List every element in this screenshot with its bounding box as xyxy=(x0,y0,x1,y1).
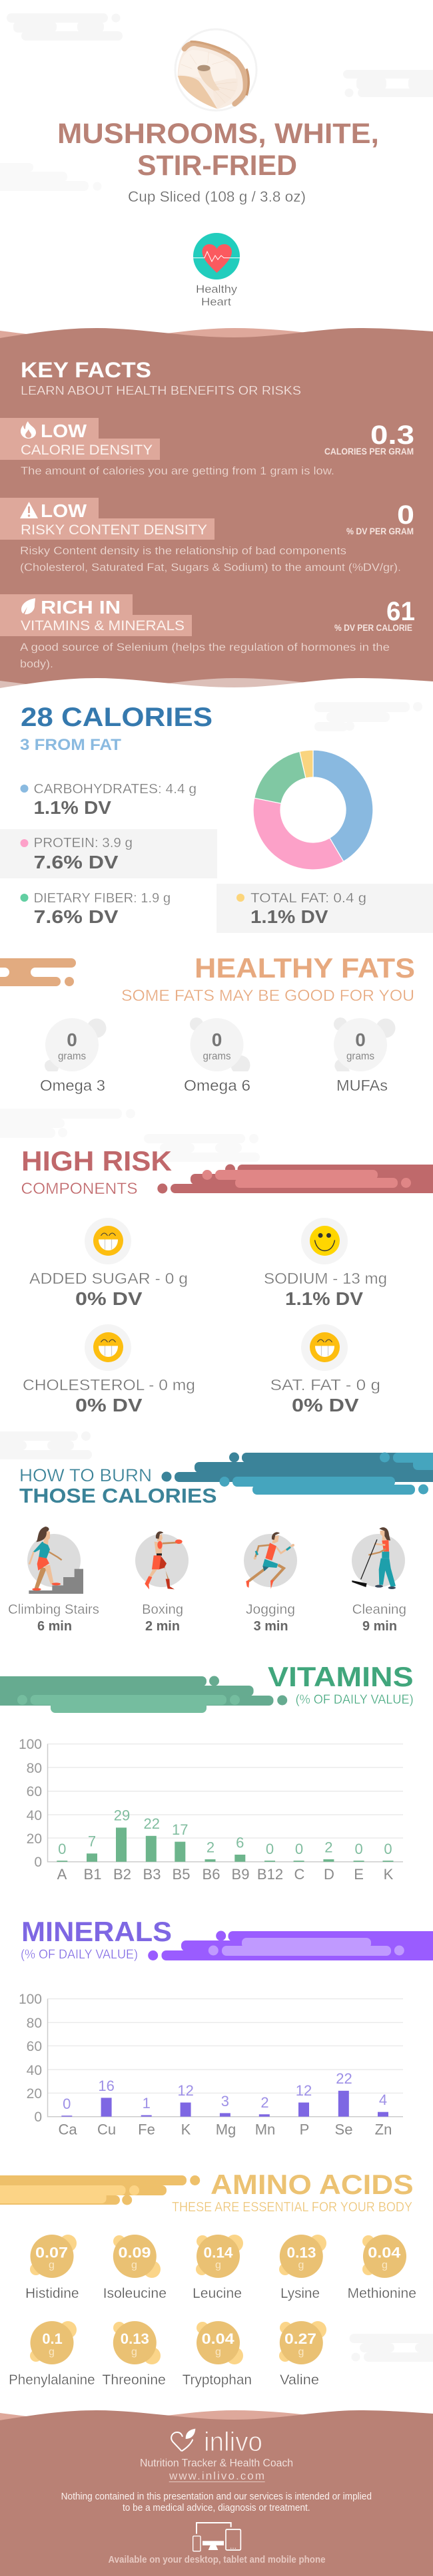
panel: minerals xyxy=(19,1916,433,2137)
panel: vitamins xyxy=(0,1661,414,1883)
risk: added sugar: ADDED SUGAR - 0 g xyxy=(29,1270,188,1287)
amino acid: methionine xyxy=(348,2235,416,2301)
bar chart: minerals percent daily value: 3 xyxy=(221,2093,229,2110)
heading: healthy fats: HEALTHY FATS xyxy=(195,952,415,984)
amino acid: phenylalanine: g xyxy=(49,2346,55,2358)
bar chart: vitamins percent daily value: 0 xyxy=(34,1855,42,1870)
fact: rich in vitamins and minerals: 61 xyxy=(386,597,415,626)
heading: amino acids xyxy=(172,2169,414,2215)
icon: flame xyxy=(21,421,36,439)
risk: cholesterol: CHOLESTEROL - 0 mg xyxy=(23,1376,195,1393)
tagline and website: www.inlivo.com xyxy=(169,2470,264,2482)
macro: carbohydrates: 1.1% DV xyxy=(33,797,111,818)
bar chart: vitamins percent daily value: D xyxy=(324,1866,334,1883)
heading: high risk: HIGH RISK xyxy=(21,1145,172,1177)
food photo: mushroom in circle xyxy=(175,29,256,110)
risk: saturated fat xyxy=(270,1324,380,1415)
activity: boxing xyxy=(135,1531,189,1634)
icon label: healthy heart xyxy=(196,283,238,308)
heading: minerals: MINERALS xyxy=(21,1916,172,1947)
amino acid: isoleucine xyxy=(103,2235,167,2301)
fact: calorie density xyxy=(0,418,414,477)
amino acid: threonine: Threonine xyxy=(102,2372,166,2388)
icon: boxer xyxy=(135,1531,189,1589)
icon: warning triangle xyxy=(20,502,38,518)
risk: saturated fat: 0% DV xyxy=(292,1395,359,1415)
amino acid: phenylalanine: 0.1 xyxy=(42,2330,63,2347)
risk: sodium: 1.1% DV xyxy=(285,1288,363,1309)
bar chart: vitamins percent daily value: 29 xyxy=(114,1807,130,1824)
risk: cholesterol xyxy=(23,1324,195,1415)
risk: added sugar xyxy=(29,1218,188,1309)
heading: minerals: (% OF DAILY VALUE) xyxy=(21,1948,138,1962)
icon: grinning face xyxy=(93,1332,123,1362)
amino acid: tryptophan: g xyxy=(215,2346,221,2358)
macro: total fat xyxy=(217,884,433,933)
title xyxy=(57,118,379,182)
amino acid: methionine: g xyxy=(382,2260,388,2271)
risk: sodium xyxy=(264,1218,387,1309)
bar chart: vitamins percent daily value: B6 xyxy=(203,1866,220,1883)
macro: total fat: TOTAL FAT: 0.4 g xyxy=(250,891,366,906)
icon: leaf xyxy=(21,598,35,614)
activity: jogging xyxy=(244,1532,297,1634)
fat: omega 6: Omega 6 xyxy=(184,1077,250,1094)
activity: climbing stairs: 6 min xyxy=(37,1619,72,1634)
disclaimer: to be a medical advice, diagnosis or treatment. xyxy=(123,2502,310,2513)
fat: omega 3: Omega 3 xyxy=(40,1077,105,1094)
bar chart: minerals percent daily value: 0 xyxy=(34,2110,42,2125)
bar chart: minerals percent daily value: Zn xyxy=(375,2121,392,2137)
bar chart: vitamins percent daily value: B1 xyxy=(84,1866,101,1883)
icon: woman climbing stairs xyxy=(27,1527,83,1594)
bar chart: vitamins percent daily value: 2 xyxy=(324,1839,333,1855)
bar chart: vitamins percent daily value: B9 xyxy=(232,1866,249,1883)
bar chart: minerals percent daily value: K xyxy=(181,2121,191,2137)
icon: woman sweeping xyxy=(352,1527,405,1589)
bar chart: minerals percent daily value: Ca xyxy=(58,2121,77,2137)
disclaimer xyxy=(61,2491,372,2513)
heading: vitamins xyxy=(268,1661,414,1707)
bar chart: minerals percent daily value: 80 xyxy=(27,2016,42,2031)
amino acid: histidine: Histidine xyxy=(25,2286,79,2301)
bar chart: minerals percent daily value: 20 xyxy=(27,2086,42,2102)
amino acid: isoleucine: g xyxy=(131,2260,137,2271)
availability note: Available on your desktop, tablet and mobile phone xyxy=(108,2554,325,2565)
amino acid: valine: g xyxy=(298,2346,304,2358)
bar chart: minerals percent daily value: P xyxy=(300,2121,309,2137)
bar chart: vitamins percent daily value: 60 xyxy=(27,1784,42,1799)
bar chart: vitamins percent daily value: B12 xyxy=(257,1866,283,1883)
fact: risky content density xyxy=(0,498,414,574)
banner: vitamins xyxy=(0,1676,287,1713)
fat: omega 6 xyxy=(184,1017,250,1094)
tagline and website: Nutrition Tracker & Health Coach xyxy=(140,2456,293,2469)
title: STIR-FRIED xyxy=(137,150,297,182)
fact: rich in vitamins and minerals: % DV PER CALORIE xyxy=(334,623,412,633)
amino acid: tryptophan: 0.04 xyxy=(202,2330,234,2347)
fact: calorie density: 0.3 xyxy=(370,421,414,450)
activity: cleaning xyxy=(352,1527,406,1634)
fact: rich in vitamins and minerals: VITAMINS & MINERALS xyxy=(21,618,185,634)
bar chart: minerals percent daily value: 12 xyxy=(177,2082,194,2099)
fat: mufas: 0 xyxy=(355,1029,366,1050)
heading: healthy fats: SOME FATS MAY BE GOOD FOR YOU xyxy=(121,987,414,1005)
heading: key facts: KEY FACTS xyxy=(21,358,151,382)
bar chart: minerals percent daily value: 2 xyxy=(260,2094,269,2111)
bar chart: vitamins percent daily value: A xyxy=(57,1866,67,1883)
activity: boxing: 2 min xyxy=(145,1619,180,1634)
bar chart: vitamins percent daily value: C xyxy=(294,1866,305,1883)
macro: dietary fiber xyxy=(20,891,171,927)
amino acid: histidine: 0.07 xyxy=(35,2244,68,2261)
bar chart: vitamins percent daily value xyxy=(19,1737,403,1883)
amino acid: threonine: g xyxy=(131,2346,137,2358)
bar chart: vitamins percent daily value: 22 xyxy=(144,1815,160,1832)
fact: rich in vitamins and minerals xyxy=(0,594,415,670)
heading: minerals xyxy=(21,1916,172,1962)
fact: rich in vitamins and minerals: body). xyxy=(20,657,53,670)
fact: calorie density: CALORIES PER GRAM xyxy=(324,447,414,457)
heading: high risk xyxy=(21,1145,172,1198)
bar chart: vitamins percent daily value: 0 xyxy=(354,1841,363,1857)
activity: climbing stairs xyxy=(8,1527,99,1634)
bar chart: minerals percent daily value: 100 xyxy=(19,1992,42,2007)
macro: protein: 7.6% DV xyxy=(33,852,119,872)
fact: risky content density: Risky Content density is the relationship of bad components xyxy=(20,544,346,557)
icon: grinning face xyxy=(310,1332,340,1362)
macro: carbohydrates: CARBOHYDRATES: 4.4 g xyxy=(33,782,197,797)
banner: high risk xyxy=(157,1165,433,1194)
fat: omega 6: 0 xyxy=(212,1029,222,1050)
fat: omega 3 xyxy=(40,1018,107,1094)
heading: vitamins: (% OF DAILY VALUE) xyxy=(296,1693,414,1707)
fact: rich in vitamins and minerals: A good source of Selenium (helps the regulation of hormones in the xyxy=(20,641,390,653)
macro: dietary fiber: DIETARY FIBER: 1.9 g xyxy=(33,891,171,906)
logo: inlivo xyxy=(171,2426,262,2457)
fact: rich in vitamins and minerals: RICH IN xyxy=(41,597,121,618)
bar chart: vitamins percent daily value: 0 xyxy=(384,1841,392,1857)
amino acid: histidine xyxy=(25,2235,79,2301)
amino acid: lysine xyxy=(279,2235,326,2301)
amino acid: valine: Valine xyxy=(280,2372,319,2388)
banner: minerals xyxy=(148,1931,433,1960)
amino acid: lysine: Lysine xyxy=(280,2286,320,2301)
fat: omega 3: 0 xyxy=(67,1029,77,1050)
icon: healthy heart xyxy=(193,233,240,279)
amino acid: threonine: 0.13 xyxy=(121,2330,149,2347)
bar chart: vitamins percent daily value: K xyxy=(384,1866,394,1883)
fat: mufas xyxy=(334,1017,396,1094)
fact: calorie density: The amount of calories you are getting from 1 gram is low. xyxy=(21,464,334,477)
heading: vitamins: VITAMINS xyxy=(268,1661,414,1692)
bar chart: minerals percent daily value: Cu xyxy=(97,2121,116,2137)
amino acid: lysine: g xyxy=(298,2260,304,2271)
bar chart: vitamins percent daily value: 0 xyxy=(295,1841,303,1857)
bar chart: minerals percent daily value: 12 xyxy=(296,2082,312,2099)
icon: runner xyxy=(244,1532,297,1589)
fat: omega 6: grams xyxy=(203,1051,230,1062)
bar chart: minerals percent daily value: Mg xyxy=(216,2121,236,2137)
panel: key facts xyxy=(0,328,433,693)
header: food title block xyxy=(57,29,379,308)
risk: saturated fat: SAT. FAT - 0 g xyxy=(270,1376,380,1393)
heading: key facts xyxy=(21,358,301,397)
amino acid: valine xyxy=(279,2321,326,2388)
bar chart: vitamins percent daily value: 2 xyxy=(207,1839,215,1855)
amino acid: isoleucine: Isoleucine xyxy=(103,2286,167,2301)
activity: boxing: Boxing xyxy=(142,1602,183,1617)
banner: burn calories xyxy=(161,1452,433,1495)
icon: grinning face xyxy=(93,1226,123,1256)
disclaimer: Nothing contained in this presentation and our services is intended or implied xyxy=(61,2491,372,2502)
amino acid: threonine xyxy=(102,2321,166,2388)
amino acid: methionine: Methionine xyxy=(348,2286,416,2301)
risk: added sugar: 0% DV xyxy=(75,1288,143,1309)
icon label: healthy heart: Heart xyxy=(201,295,231,308)
amino acid: isoleucine: 0.09 xyxy=(119,2244,151,2261)
bar chart: minerals percent daily value: 1 xyxy=(143,2095,151,2112)
amino acid: leucine: g xyxy=(215,2260,221,2271)
icon: devices xyxy=(193,2523,240,2551)
footer xyxy=(0,2410,433,2576)
panel: calories xyxy=(0,703,433,933)
bar chart: vitamins percent daily value: 0 xyxy=(58,1841,66,1857)
amino acid: tryptophan: Tryptophan xyxy=(183,2372,252,2388)
heading: calories: 28 CALORIES xyxy=(21,703,213,732)
bar chart: vitamins percent daily value: B3 xyxy=(143,1866,161,1883)
heading: key facts: LEARN ABOUT HEALTH BENEFITS OR RISKS xyxy=(21,384,301,397)
logo: inlivo: inlivo xyxy=(204,2426,262,2457)
amino acid: phenylalanine: Phenylalanine xyxy=(9,2372,95,2388)
bar chart: minerals percent daily value: 22 xyxy=(336,2070,352,2087)
banner: healthy fats xyxy=(0,958,76,986)
amino acid: histidine: g xyxy=(49,2260,55,2271)
fact: calorie density: CALORIE DENSITY xyxy=(21,443,153,458)
serving size: Cup Sliced (108 g / 3.8 oz) xyxy=(128,188,306,205)
bar chart: minerals percent daily value: 4 xyxy=(379,2092,387,2108)
risk: cholesterol: 0% DV xyxy=(75,1395,143,1415)
amino acid: phenylalanine xyxy=(9,2321,95,2388)
bar chart: vitamins percent daily value: 0 xyxy=(266,1841,274,1857)
icon: smiling face xyxy=(310,1226,340,1256)
risk: sodium: SODIUM - 13 mg xyxy=(264,1270,387,1287)
macro: protein xyxy=(0,829,217,878)
amino acid: tryptophan xyxy=(183,2321,252,2388)
heading: how to burn xyxy=(19,1465,217,1507)
amino acid: valine: 0.27 xyxy=(284,2330,316,2347)
amino acid: lysine: 0.13 xyxy=(286,2244,316,2261)
bar chart: vitamins percent daily value: 17 xyxy=(172,1821,189,1838)
fact: risky content density: (Cholesterol, Saturated Fat, Sugars & Sodium) to the amount (%DV/gr). xyxy=(20,561,401,574)
fat: omega 3: grams xyxy=(58,1051,86,1062)
heading: amino acids: AMINO ACIDS xyxy=(211,2169,414,2200)
panel: healthy fats xyxy=(0,952,415,1094)
bar chart: vitamins percent daily value: 100 xyxy=(19,1737,42,1752)
heading: calories xyxy=(20,703,213,754)
macro: dietary fiber: 7.6% DV xyxy=(33,906,119,927)
bar chart: vitamins percent daily value: 20 xyxy=(27,1831,42,1847)
heading: amino acids: THESE ARE ESSENTIAL FOR YOUR BODY xyxy=(172,2200,412,2215)
heading: how to burn: HOW TO BURN xyxy=(19,1465,152,1485)
bar chart: minerals percent daily value: 16 xyxy=(98,2078,115,2094)
tagline and website xyxy=(140,2456,293,2482)
fact: risky content density: % DV PER GRAM xyxy=(346,526,414,536)
bar chart: vitamins percent daily value: 40 xyxy=(27,1808,42,1823)
activity: jogging: 3 min xyxy=(254,1619,288,1634)
heading: high risk: COMPONENTS xyxy=(21,1180,137,1198)
activity: climbing stairs: Climbing Stairs xyxy=(8,1602,99,1617)
amino acid: leucine xyxy=(193,2235,243,2301)
panel: how to burn those calories xyxy=(8,1452,433,1634)
macro: carbohydrates xyxy=(20,782,197,818)
banner: amino acids xyxy=(0,2175,200,2205)
heading: healthy fats xyxy=(121,952,415,1005)
fat: mufas: grams xyxy=(346,1051,374,1062)
donut chart: macronutrients xyxy=(253,750,373,870)
amino acid: methionine: 0.04 xyxy=(368,2244,401,2261)
macro: protein: PROTEIN: 3.9 g xyxy=(33,836,133,850)
bar chart: minerals percent daily value: 40 xyxy=(27,2063,42,2078)
bar chart: vitamins percent daily value: 7 xyxy=(88,1833,96,1850)
bar chart: minerals percent daily value: 60 xyxy=(27,2039,42,2054)
fact: calorie density: LOW xyxy=(41,421,87,441)
amino acid: leucine: Leucine xyxy=(193,2286,242,2301)
bar chart: vitamins percent daily value: 80 xyxy=(27,1761,42,1776)
fact: risky content density: RISKY CONTENT DENSITY xyxy=(21,522,207,538)
title: MUSHROOMS, WHITE, xyxy=(57,118,379,150)
amino acid: leucine: 0.14 xyxy=(204,2244,233,2261)
macro: total fat: 1.1% DV xyxy=(250,906,328,927)
fact: risky content density: 0 xyxy=(397,500,414,530)
bar chart: minerals percent daily value: Fe xyxy=(138,2121,155,2137)
activity: cleaning: Cleaning xyxy=(352,1602,406,1617)
fact: risky content density: LOW xyxy=(41,500,87,521)
bar chart: minerals percent daily value: Mn xyxy=(255,2121,275,2137)
activity: cleaning: 9 min xyxy=(362,1619,397,1634)
bar chart: minerals percent daily value: 0 xyxy=(63,2096,71,2112)
heading: how to burn: THOSE CALORIES xyxy=(19,1484,217,1507)
heading: calories: 3 FROM FAT xyxy=(20,736,121,754)
bar chart: minerals percent daily value xyxy=(19,1992,403,2137)
panel: high risk components xyxy=(21,1145,433,1415)
bar chart: vitamins percent daily value: B5 xyxy=(173,1866,190,1883)
bar chart: minerals percent daily value: Se xyxy=(335,2121,352,2137)
bar chart: vitamins percent daily value: E xyxy=(354,1866,364,1883)
icon label: healthy heart: Healthy xyxy=(196,283,238,295)
activity: jogging: Jogging xyxy=(246,1602,295,1617)
bar chart: vitamins percent daily value: B2 xyxy=(113,1866,131,1883)
bar chart: vitamins percent daily value: 6 xyxy=(236,1834,244,1851)
fat: mufas: MUFAs xyxy=(336,1077,388,1094)
panel: amino acids xyxy=(0,2169,416,2388)
